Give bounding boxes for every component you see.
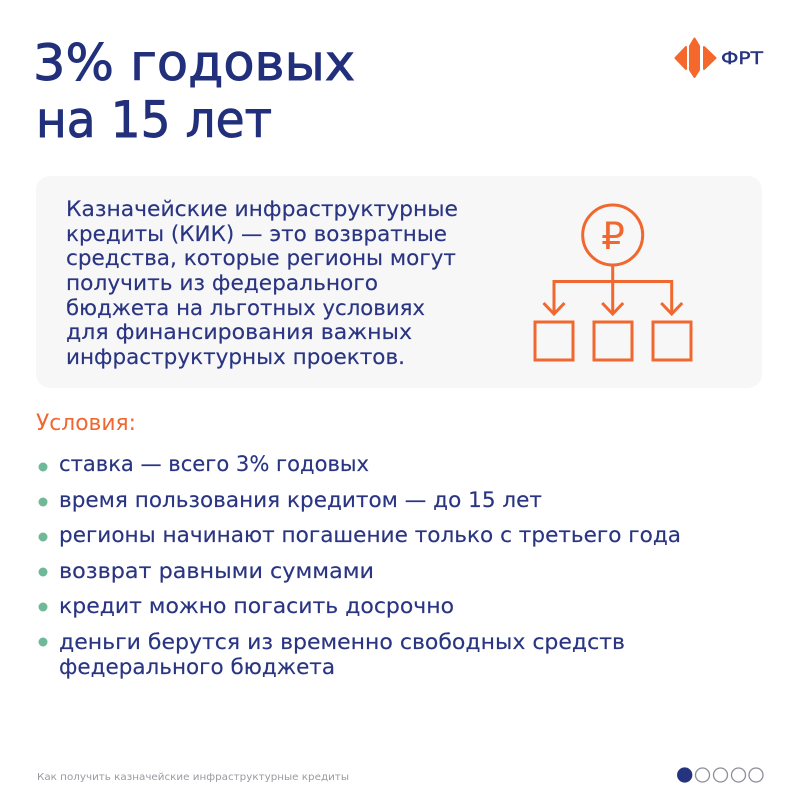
list item: term: время пользования кредитом — до 15 лет xyxy=(59,488,542,513)
logo: ФРТ xyxy=(676,38,764,77)
definition text: Казначейские инфраструктурные xyxy=(66,197,458,222)
panel: definition xyxy=(36,176,762,388)
icon: ruble distribution diagram xyxy=(535,205,691,360)
definition text: для финансирования важных xyxy=(66,320,412,345)
list item: repayment start: регионы начинают погашение только с третьего года xyxy=(59,523,681,548)
definition text: получить из федерального xyxy=(66,271,378,296)
list item: funding source: федерального бюджета xyxy=(59,655,335,680)
definition text: кредиты (КИК) — это возвратные xyxy=(66,222,447,247)
title: 3% годовых xyxy=(33,34,355,92)
title: на 15 лет xyxy=(36,91,272,149)
icon: logo diamond xyxy=(676,38,716,77)
list item: early repayment: кредит можно погасить досрочно xyxy=(59,594,454,619)
pagination dots xyxy=(678,768,763,782)
definition text: бюджета на льготных условиях xyxy=(66,296,425,321)
list item: rate: ставка — всего 3% годовых xyxy=(59,452,369,477)
conditions heading: Условия: xyxy=(36,411,136,436)
icon: ruble distribution diagram: ₽ xyxy=(601,215,625,258)
list item: funding source: деньги берутся из временно свободных средств xyxy=(59,630,625,655)
footer caption: Как получить казначейские инфраструктурные кредиты xyxy=(37,772,349,783)
conditions list xyxy=(38,452,681,680)
definition text: средства, которые регионы могут xyxy=(66,246,456,271)
definition text: инфраструктурных проектов. xyxy=(66,345,405,370)
title xyxy=(33,34,355,149)
logo wordmark: ФРТ xyxy=(721,49,764,69)
list item: funding source xyxy=(38,630,625,680)
definition text xyxy=(66,197,458,370)
list item: equal sums: возврат равными суммами xyxy=(59,559,374,584)
